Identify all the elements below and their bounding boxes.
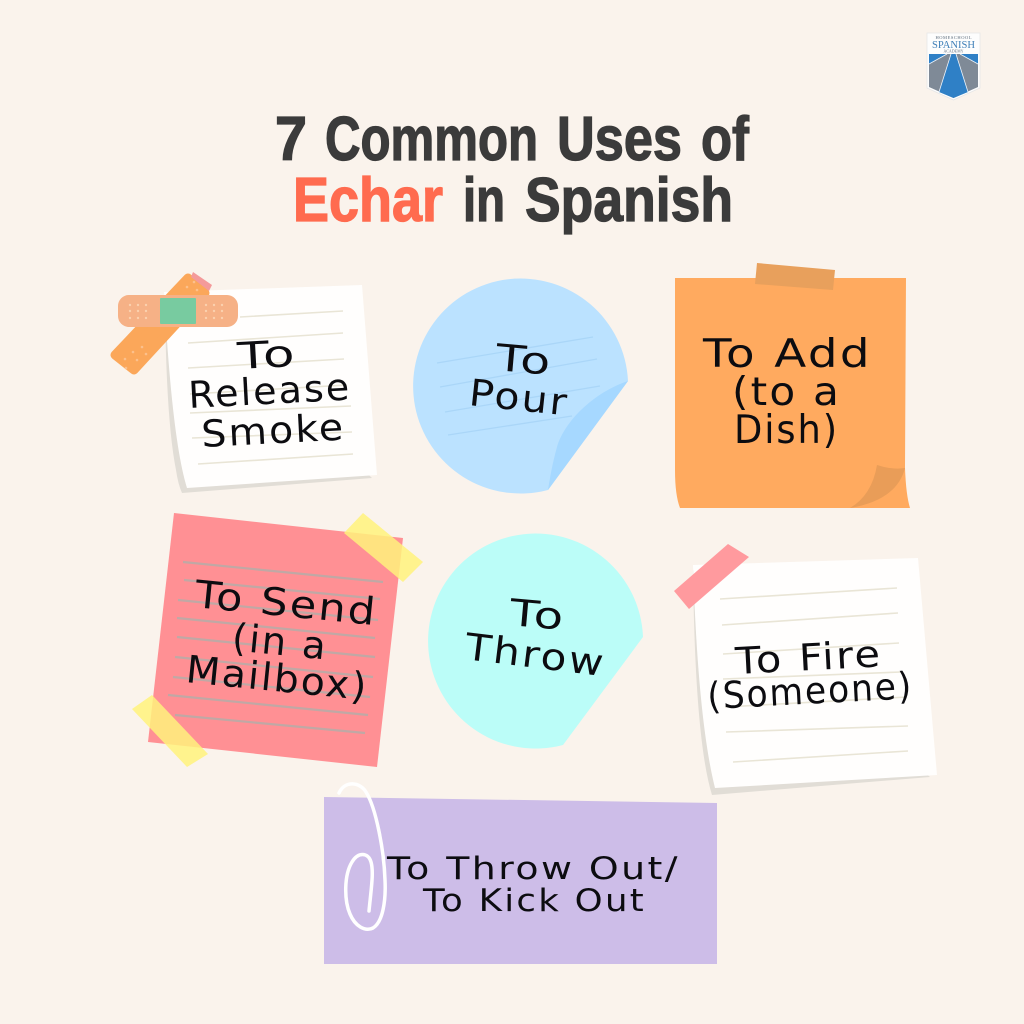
panel: to pour [413, 279, 628, 494]
label: to throw out / to kick out [386, 851, 680, 919]
label: to pour: Pour [467, 371, 571, 424]
label: to fire someone: To Fire [733, 632, 883, 683]
label: to release smoke: Release [187, 366, 352, 417]
icon: yellow tape bottom [132, 695, 208, 767]
logo: academy shield: SPANISH [932, 39, 975, 51]
label: to fire someone [706, 632, 914, 718]
label: to add to a dish: Dish) [734, 408, 839, 453]
title: of [701, 105, 749, 174]
label: to send in a mailbox [184, 572, 380, 709]
title: Uses [557, 105, 682, 174]
icon: tape [755, 263, 835, 290]
label: to release smoke: Smoke [200, 406, 346, 456]
panel: to add to a dish [675, 263, 910, 508]
label: to throw: Throw [462, 625, 608, 685]
title: Common [325, 105, 538, 174]
title: Echar [293, 166, 443, 235]
label: to send in a mailbox: (in a [230, 615, 330, 668]
label: to throw [462, 591, 608, 685]
label: to throw out / to kick out: To Kick Out [422, 883, 646, 919]
title: Spanish [525, 166, 733, 235]
icon: yellow tape top [344, 513, 423, 582]
title: in [463, 166, 505, 235]
logo: academy shield [927, 33, 980, 100]
icon: orange bandage [115, 272, 212, 370]
label: to throw out / to kick out: To Throw Out/ [386, 851, 680, 887]
icon: paperclip [339, 784, 385, 929]
label: to add to a dish: To Add [702, 332, 872, 377]
label: to pour: To [493, 336, 555, 384]
logo: academy shield: ACADEMY [944, 50, 964, 54]
panel: to send in a mailbox [132, 513, 423, 767]
label: to release smoke [187, 332, 352, 456]
title [275, 105, 749, 235]
label: to pour [467, 336, 571, 424]
panel: to release smoke [115, 272, 377, 493]
label: to add to a dish: (to a [732, 370, 841, 415]
label: to send in a mailbox: Mailbox) [184, 647, 371, 709]
panel: to throw out / to kick out [324, 784, 717, 964]
icon: peach bandage [118, 295, 238, 327]
title: 7 [275, 105, 307, 174]
logo: academy shield: HOMESCHOOL [936, 35, 972, 40]
panel: to throw [428, 534, 643, 749]
label: to add to a dish [702, 332, 872, 453]
label: to send in a mailbox: To Send [192, 572, 380, 634]
label: to throw: To [507, 591, 568, 639]
label: to release smoke: To [235, 332, 298, 378]
icon: pink tape [674, 544, 749, 609]
panel: to fire someone [674, 544, 937, 795]
label: to fire someone: (Someone) [706, 664, 914, 718]
